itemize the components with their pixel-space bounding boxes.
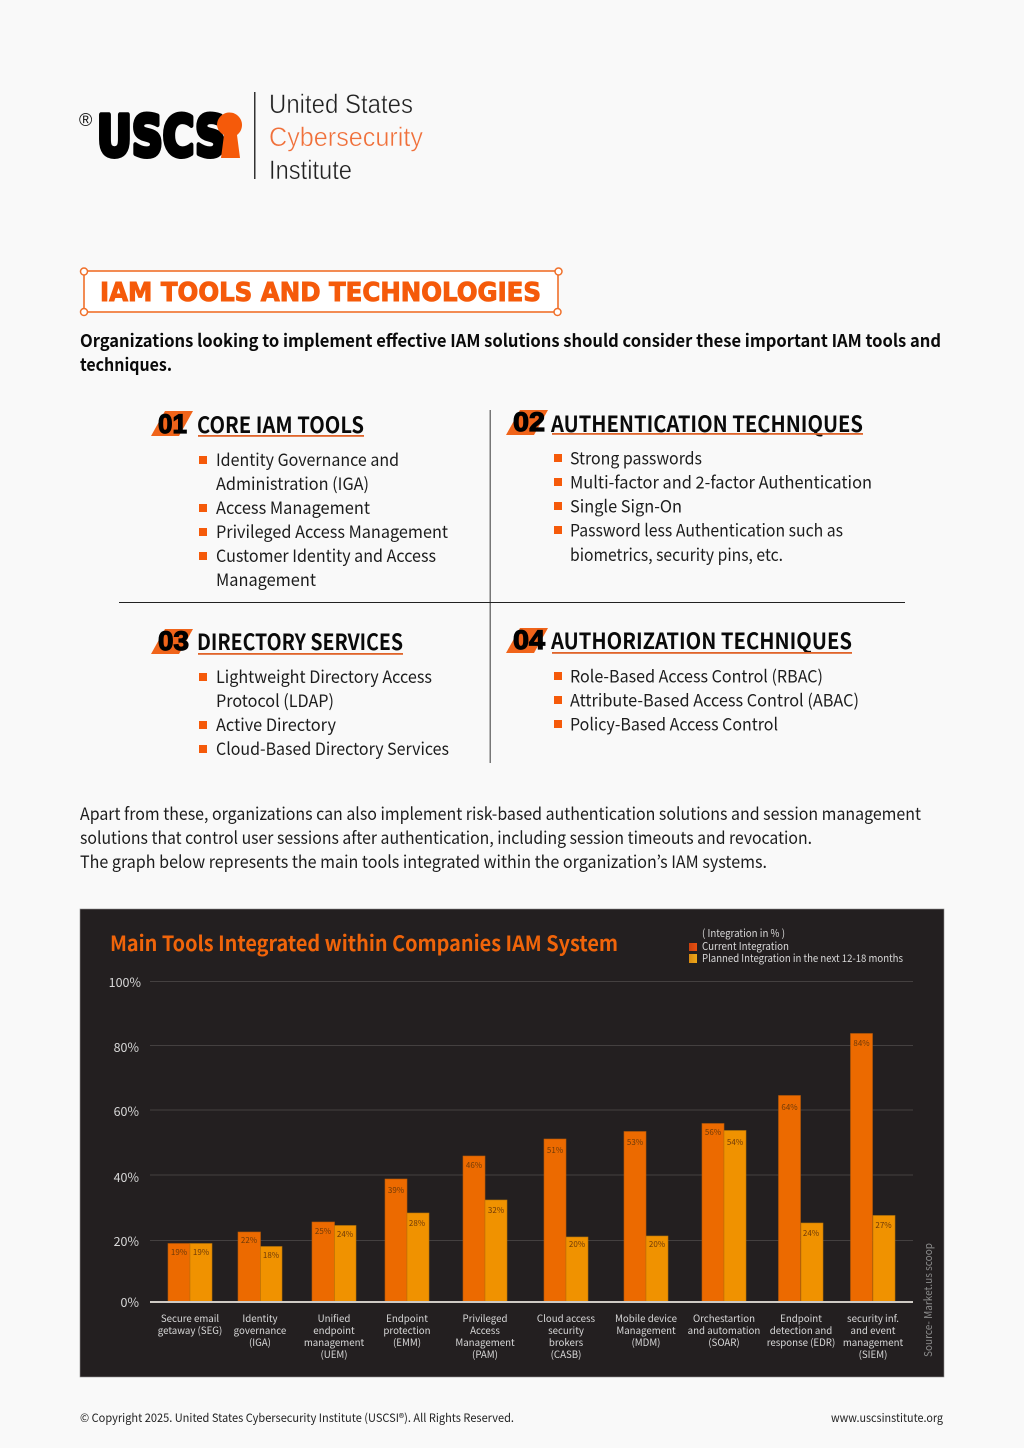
title box [80,268,562,316]
bars: mobile device management [624,1132,668,1302]
x axis labels: Orchestartion [693,1311,755,1325]
list: authentication techniques: Strong passwords [570,444,702,470]
bars: security information and event management [850,1034,895,1302]
bars: mobile device management: 20% [649,1239,666,1250]
bars: privileged access management: 46% [466,1160,483,1171]
x axis line [150,1301,913,1303]
x axis labels: endpoint [313,1323,355,1337]
list: authentication techniques: Single Sign-On [570,492,682,518]
bars: endpoint detection and response [778,1096,823,1302]
list: directory services: Protocol (LDAP) [216,687,334,712]
bars: cloud access security brokers: 51% [547,1145,564,1156]
x axis labels: Cloud access [537,1311,596,1325]
x axis labels: (UEM) [320,1347,348,1361]
list: core IAM tools [199,446,449,591]
bars: cloud access security brokers: 20% [569,1239,586,1250]
x axis labels: Endpoint [386,1311,428,1325]
number badge 01: 01 [158,409,187,439]
heading: authentication techniques: AUTHENTICATION TECHNIQUES [550,407,863,439]
bars: privileged access management [463,1156,507,1302]
chart title: Main Tools Integrated within Companies IAM System [110,928,618,958]
list: directory services: Lightweight Directory Access [216,663,432,688]
bars: mobile device management: 53% [627,1137,644,1148]
legend: Current Integration [702,939,789,954]
logo name [269,89,423,185]
list: core IAM tools: Privileged Access Management [216,518,449,543]
footer [80,1410,943,1426]
x axis labels: Management [455,1335,515,1349]
x axis labels: Endpoint [780,1311,822,1325]
heading: core IAM tools: CORE IAM TOOLS [197,408,364,440]
y axis labels: 100% [109,972,141,991]
intro text: Organizations looking to implement effective IAM solutions should consider these important IAM tools and [80,328,941,353]
panel: bar chart [80,909,944,1377]
bars: orchestration and automation: 54% [727,1137,744,1148]
bars: unified endpoint management: 25% [315,1226,332,1237]
y axis labels: 40% [114,1167,139,1186]
number badge 02: 02 [513,407,545,437]
list: core IAM tools: Customer Identity and Access [216,542,436,567]
title corner handles [80,268,562,316]
quadrant dividers [119,410,905,763]
list: directory services: Cloud-Based Directory Services [216,735,449,760]
y axis labels: 60% [114,1101,139,1120]
number badge 04: 04 [513,625,545,655]
bars: secure email gateway [168,1244,212,1302]
list: core IAM tools: Identity Governance and [216,446,399,471]
paragraph: solutions that control user sessions after authentication, including session timeouts and revocation. [80,824,812,849]
logo divider [254,92,256,179]
panel: core IAM tools [151,408,449,591]
x axis labels: Access [470,1323,500,1337]
logo name: Cybersecurity [269,122,423,152]
x axis labels: (EMM) [393,1335,421,1349]
bars: privileged access management: 32% [488,1205,505,1216]
x axis labels: security inf. [847,1311,899,1325]
y axis labels: 0% [121,1292,139,1311]
x axis labels: Management [616,1323,676,1337]
list: authorization techniques: Attribute-Based Access Control (ABAC) [570,686,859,712]
title: IAM TOOLS AND TECHNOLOGIES [100,278,541,308]
icon: keyhole [217,113,242,158]
bars: secure email gateway: 19% [193,1247,210,1258]
x axis labels: (SIEM) [859,1347,887,1361]
title frame [84,271,558,312]
heading: authorization techniques: AUTHORIZATION TECHNIQUES [550,624,852,656]
list: authentication techniques: biometrics, security pins, etc. [570,541,783,566]
bars: endpoint protection: 28% [409,1218,426,1229]
bars: endpoint detection and response: 24% [803,1228,820,1239]
bars: endpoint detection and response: 64% [781,1102,798,1113]
bars: identity governance [238,1232,282,1302]
paragraph [80,800,922,873]
bars: endpoint protection [385,1179,429,1302]
list: core IAM tools: Administration (IGA) [216,470,369,495]
x axis labels: (SOAR) [708,1335,740,1349]
x axis labels: (MDM) [632,1335,660,1349]
list: authentication techniques: Multi-factor and 2-factor Authentication [570,468,872,494]
x axis labels: detection and [770,1323,832,1337]
bars: endpoint protection: 39% [388,1185,405,1196]
paragraph: Apart from these, organizations can also implement risk-based authentication solutions and session management [80,800,922,825]
panel: directory services [151,625,449,760]
panel: authentication techniques [506,407,872,566]
x axis labels: Privileged [463,1311,507,1325]
list: authorization techniques [554,662,859,736]
y axis labels: 80% [114,1037,139,1056]
x axis labels: getaway (SEG) [158,1323,222,1337]
x axis labels: protection [383,1323,431,1337]
legend [689,926,903,966]
logo name: United States [269,89,413,119]
list: authorization techniques: Policy-Based Access Control [570,710,778,736]
x axis labels: governance [234,1323,286,1337]
chart background [80,909,944,1377]
bars: security information and event management: 27% [875,1220,892,1231]
list: core IAM tools: Management [216,566,317,591]
list: authentication techniques: Password less Authentication such as [570,516,843,542]
x axis labels: and automation [688,1323,760,1337]
x axis labels: management [304,1335,365,1349]
y axis labels: 20% [114,1231,139,1250]
intro text: techniques. [80,352,172,377]
x axis labels: management [843,1335,904,1349]
bars: orchestration and automation [702,1124,746,1302]
logo: USCSI [79,89,423,185]
heading: directory services: DIRECTORY SERVICES [197,625,403,657]
grid lines [150,982,913,1240]
x axis labels: Unified [318,1311,350,1325]
list: core IAM tools: Access Management [216,494,371,519]
website: www.uscsinstitute.org [831,1410,943,1426]
x axis labels: (IGA) [249,1335,271,1349]
registered mark: ® [79,110,92,130]
x axis labels: and event [851,1323,896,1337]
bars: identity governance: 18% [263,1250,280,1261]
x axis labels: security [548,1323,584,1337]
logo name: Institute [269,155,352,185]
x axis labels: (PAM) [472,1347,498,1361]
source note: Source- Market.us scoop [920,1243,936,1357]
bars: cloud access security brokers [544,1139,588,1302]
x axis labels: Secure email [161,1311,219,1325]
list: authentication techniques [554,444,872,566]
number badge 03: 03 [158,626,189,656]
x axis labels: Mobile device [615,1311,677,1325]
panel: authorization techniques [506,624,859,736]
paragraph: The graph below represents the main tools integrated within the organization’s IAM systems. [80,848,767,873]
legend: Planned Integration in the next 12-18 months [702,951,903,966]
x axis labels: Identity [242,1311,278,1325]
copyright: © Copyright 2025. United States Cybersecurity Institute (USCSI®). All Rights Reserved. [80,1410,514,1426]
list: directory services: Active Directory [216,711,336,736]
x axis labels: brokers [549,1335,584,1349]
bars: security information and event management: 84% [853,1038,870,1049]
logo wordmark: USCS [97,104,226,170]
x axis labels [158,1311,904,1361]
bars: orchestration and automation: 56% [705,1127,722,1138]
list: directory services [199,663,449,760]
bars: identity governance: 22% [241,1235,258,1246]
x axis labels: (CASB) [551,1347,581,1361]
bars: secure email gateway: 19% [171,1247,188,1258]
x axis labels: response (EDR) [767,1335,835,1349]
bars: unified endpoint management [312,1222,356,1302]
y axis labels [109,972,141,1311]
legend: ( Integration in % ) [702,926,785,941]
bars: unified endpoint management: 24% [337,1229,354,1240]
intro text [80,328,941,377]
list: authorization techniques: Role-Based Access Control (RBAC) [570,662,823,688]
